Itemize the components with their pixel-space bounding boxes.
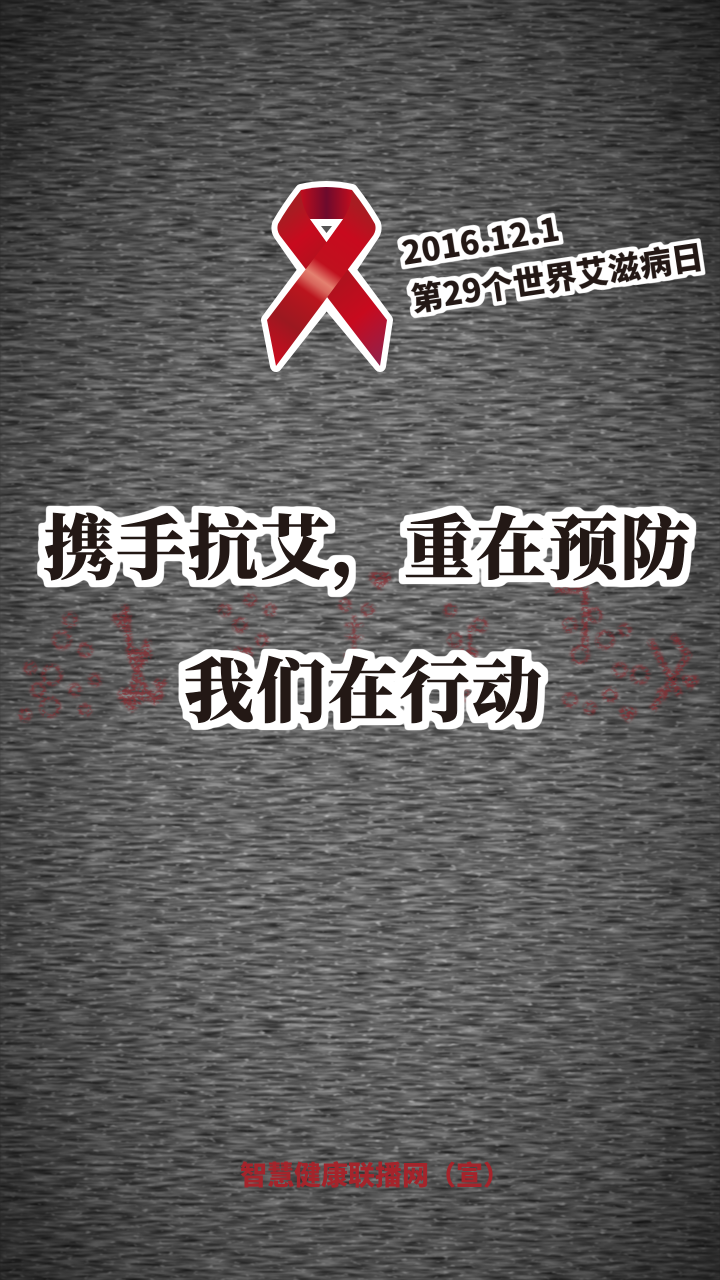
- ribbon white outline: [267, 187, 387, 366]
- event label: 第29个世界艾滋病日: [408, 232, 706, 321]
- ribbon strand to lower right: [277, 190, 387, 366]
- ribbon strand to lower left: [267, 190, 376, 366]
- title line 2: 我们在行动: [184, 636, 544, 737]
- ribbon top fold: [301, 187, 352, 219]
- date label: 2016.12.1: [398, 205, 562, 275]
- title line 1: 携手抗艾，重在预防: [44, 493, 692, 594]
- footer credit: 智慧健康联播网（宣）: [240, 1154, 510, 1193]
- faded red pattern of hearts and rings: [20, 572, 698, 722]
- ribbon white triangle: [310, 219, 343, 242]
- icon: red AIDS awareness ribbon: [267, 187, 387, 366]
- ribbon grey inner triangle: [321, 226, 332, 233]
